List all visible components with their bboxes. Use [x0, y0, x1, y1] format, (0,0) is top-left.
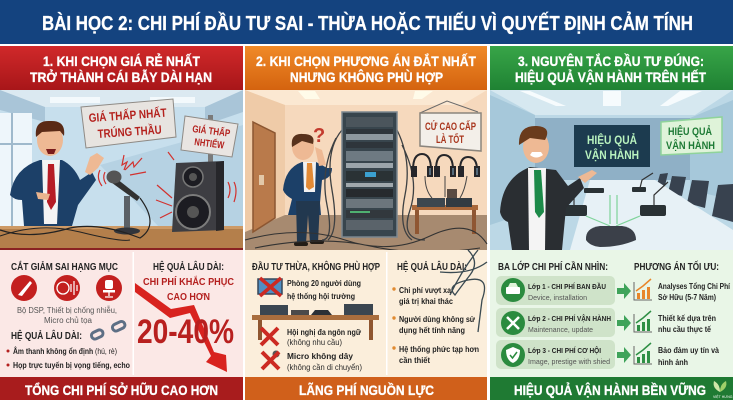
row: opportunity cost: Lớp 3 - CHI PHÍ CƠ HỘI	[528, 346, 601, 355]
panel body 2: hệ thống hội trường	[287, 292, 355, 301]
panel body 1: 20-40%	[137, 313, 234, 351]
illustration: boardroom	[490, 90, 733, 250]
row: opportunity cost: Image, prestige with shied	[528, 357, 610, 366]
footer: total cost	[0, 377, 243, 400]
arrow	[617, 315, 631, 331]
panel body 2: HỆ QUẢ LÂU DÀI:	[397, 260, 467, 273]
sign: low price	[181, 115, 238, 163]
panel body 2: Hội nghị đa ngôn ngữ	[287, 328, 361, 337]
panel body 1: CẮT GIẢM SAI HẠNG MỤC	[11, 260, 118, 273]
cable tangle	[440, 250, 487, 332]
icon: green chart	[634, 311, 652, 332]
man: confused	[283, 125, 332, 246]
row: operating cost: Lớp 2 - CHI PHÍ VẬN HÀNH	[528, 314, 611, 323]
footer: total cost: TỔNG CHI PHÍ SỞ HỮU CAO HƠN	[25, 381, 218, 398]
man: angry	[10, 121, 104, 226]
illustration: confused man with rack	[245, 90, 487, 252]
arrow: rising cost decline	[135, 283, 227, 372]
row: initial cost: Device, installation	[528, 293, 587, 302]
sound distortion marks	[98, 152, 236, 218]
table with microphones	[561, 173, 733, 250]
panel body 2: Người dùng không sử	[399, 315, 475, 324]
sign: operational efficiency: VẬN HÀNH	[666, 139, 715, 152]
equipment table	[412, 176, 478, 234]
screen: HIỆU QUẢ	[587, 134, 637, 147]
panel body 1: HỆ QUẢ LÂU DÀI:	[153, 260, 224, 273]
icon: DSP	[11, 275, 37, 301]
panel body 3: Bảo đảm uy tín và	[658, 346, 719, 355]
heading: panel 1: 1. KHI CHỌN GIÁ RẺ NHẤT	[43, 53, 200, 69]
sign: lowest price wins	[81, 99, 176, 148]
arrow	[617, 283, 631, 299]
chairs	[656, 173, 733, 222]
server rack	[322, 112, 425, 240]
panel body 2	[245, 250, 487, 377]
panel body 1: Âm thanh không ổn định (hú, rè)	[13, 347, 117, 356]
footer: sustainable operation: HIỆU QUẢ VẬN HÀNH BỀN VỮNG	[514, 381, 706, 398]
screen: VẬN HÀNH	[585, 149, 639, 162]
icon: shield	[501, 343, 525, 367]
panel body 1: HỆ QUẢ LÂU DÀI:	[11, 329, 82, 342]
sign: low price: NHTIẾW	[194, 135, 225, 152]
icon: crossed monitor	[258, 278, 282, 296]
panel body 1: Micro chủ tọa	[44, 316, 93, 325]
heading: panel 3: 3. NGUYÊN TẮC ĐẦU TƯ ĐÚNG:	[518, 52, 704, 69]
panel body 1: Bộ DSP, Thiết bị chống nhiễu,	[17, 306, 117, 315]
panel body 1: CAO HƠN	[167, 291, 210, 303]
title banner	[0, 0, 733, 44]
heading: panel 2: 2. KHI CHỌN PHƯƠNG ÁN ĐẮT NHẤT	[256, 52, 476, 69]
screen	[574, 125, 650, 167]
sign: premium is better	[420, 101, 481, 151]
row: initial cost	[496, 276, 615, 305]
panel body 2: ĐẦU TƯ THỪA, KHÔNG PHÙ HỢP	[252, 260, 380, 273]
heading: panel 1	[0, 46, 243, 90]
sign: premium is better: LÀ TỐT	[436, 132, 464, 146]
panel body 2: Phòng 20 người dùng	[287, 279, 361, 288]
row: operating cost: Maintenance, update	[528, 325, 593, 334]
panel body 3: Thiết kế dựa trên	[658, 314, 716, 323]
footer: wasted resources	[245, 377, 487, 400]
icon: broken chain	[90, 320, 126, 340]
heading: panel 2	[245, 46, 487, 90]
heading: panel 3: HIỆU QUẢ VẬN HÀNH TRÊN HẾT	[515, 68, 706, 85]
panel body 2: dụng hết tính năng	[399, 326, 465, 335]
sign: low price: GIÁ THẤP	[192, 122, 231, 140]
icon: device	[501, 278, 525, 302]
panel body 2: Chi phí vượt xa	[399, 286, 451, 295]
illustration: angry man with broken speaker	[0, 90, 243, 250]
logo: VIỆT HƯNG	[713, 394, 733, 399]
heading: panel 2: NHƯNG KHÔNG PHÙ HỢP	[290, 68, 443, 85]
icon: green chart	[634, 343, 652, 364]
logo	[713, 381, 733, 399]
panel: most expensive option	[245, 46, 487, 400]
panel body 2: Micro không dây	[287, 352, 354, 361]
sign: lowest price wins: GIÁ THẤP NHẤT	[88, 105, 168, 125]
icon: equipment on table	[252, 304, 379, 340]
panel body 2: giá trị khai thác	[399, 297, 454, 306]
icon: chair	[96, 275, 122, 301]
panel body 2: (không nhu cầu)	[287, 338, 342, 347]
speaker: damaged	[172, 161, 224, 232]
panel: cheapest option	[0, 46, 243, 400]
panel body 1: Họp trực tuyến bị vọng tiếng, echo	[13, 361, 130, 370]
panel: correct principle	[490, 46, 733, 400]
door	[253, 122, 275, 232]
sign: operational efficiency	[661, 117, 722, 155]
sign: lowest price wins: TRÚNG THẦU	[97, 122, 162, 141]
icon: crossed microphone	[262, 350, 280, 369]
footer: sustainable operation	[490, 377, 733, 400]
man: confident	[500, 126, 597, 250]
panel body 2: (không cần di chuyển)	[287, 363, 362, 372]
row: operating cost	[496, 308, 615, 337]
row: initial cost: Lớp 1 - CHI PHÍ BAN ĐẦU	[528, 281, 606, 291]
icon: tools	[501, 311, 525, 335]
panel body 3: nhu cầu thực tế	[658, 325, 711, 334]
icon: orange chart	[634, 279, 652, 300]
panel body 3: hình ảnh	[658, 358, 688, 367]
man: confused: ?	[313, 125, 325, 147]
row: opportunity cost	[496, 340, 615, 369]
panel body 3	[490, 250, 733, 377]
panel body 2: Hệ thống phức tạp hơn	[399, 345, 479, 354]
panel body 3: Sở Hữu (5-7 Năm)	[658, 293, 716, 302]
panel body 2: cần thiết	[399, 356, 430, 365]
icon: noise	[54, 275, 80, 301]
sign: operational efficiency: HIỆU QUẢ	[668, 125, 712, 138]
microphone	[0, 170, 150, 240]
footer: wasted resources: LÃNG PHÍ NGUỒN LỰC	[299, 381, 434, 398]
icon: red cross	[261, 328, 278, 345]
panel body 1: CHI PHÍ KHẮC PHỤC	[143, 275, 234, 288]
arrow	[617, 347, 631, 363]
headsets	[412, 154, 479, 176]
heading: panel 3	[490, 46, 733, 90]
panel body 3: BA LỚP CHI PHÍ CẦN NHÌN:	[498, 260, 608, 273]
heading: panel 1: TRỞ THÀNH CÁI BẪY DÀI HẠN	[30, 68, 212, 85]
sign: premium is better: CỨ CAO CẤP	[425, 120, 476, 133]
panel body 1	[0, 250, 243, 377]
